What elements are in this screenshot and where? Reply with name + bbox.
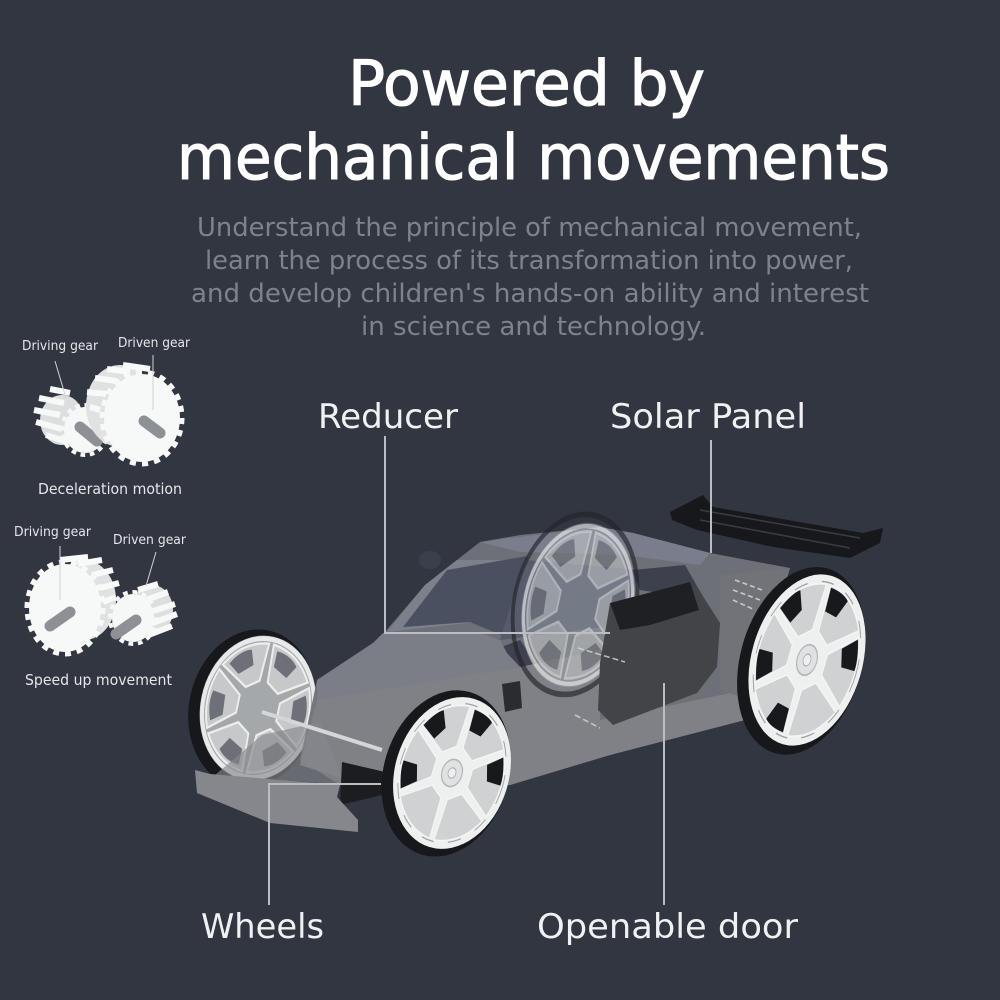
- label: Reducer: Reducer: [318, 397, 458, 437]
- title: Powered by: [348, 47, 705, 120]
- leader lines: [55, 355, 153, 410]
- title: [177, 47, 890, 194]
- subtitle text block: in science and technology.: [361, 312, 706, 342]
- ghost far wheel: [497, 503, 653, 706]
- axle: [262, 712, 382, 750]
- reducer detail: [575, 648, 625, 728]
- label: driving gear: Driving gear: [14, 525, 92, 540]
- leader lines: [60, 546, 156, 600]
- leader lines: [269, 436, 711, 905]
- label: driving gear: Driving gear: [22, 339, 99, 354]
- gear diagram: speed up movement: [14, 525, 187, 689]
- subtitle text block: Understand the principle of mechanical movement,: [197, 213, 862, 243]
- label: driven gear: Driven gear: [113, 533, 187, 548]
- title: mechanical movements: [177, 121, 890, 194]
- label: Wheels: Wheels: [201, 907, 324, 947]
- car body: [300, 527, 790, 790]
- label: Openable door: Openable door: [537, 907, 798, 947]
- car illustration: [174, 495, 886, 873]
- small driven gear: [110, 584, 177, 644]
- door: [598, 582, 720, 725]
- solar panel detail: [733, 580, 762, 610]
- large driving gear: [27, 557, 119, 654]
- subtitle text block: and develop children's hands-on ability and interest: [191, 279, 869, 309]
- front bumper: [195, 770, 358, 832]
- translucent nose over left wheel: [215, 722, 345, 785]
- subtitle text block: [191, 213, 869, 342]
- large driven gear: [86, 365, 182, 464]
- front right wheel: [362, 674, 531, 873]
- rear right wheel: [716, 552, 886, 770]
- mirror: [419, 551, 441, 569]
- label: driven gear: Driven gear: [118, 336, 191, 351]
- small driving gear: [34, 389, 108, 455]
- black front mechanism: [340, 762, 385, 805]
- left front wheel: [174, 617, 331, 800]
- gear diagram: deceleration motion: [22, 336, 191, 498]
- caption: Speed up movement: [25, 671, 172, 689]
- subtitle text block: learn the process of its transformation into power,: [205, 246, 853, 276]
- rear spoiler: [670, 495, 883, 558]
- caption: Deceleration motion: [38, 480, 182, 498]
- label: Solar Panel: Solar Panel: [610, 397, 806, 437]
- side vent: [502, 681, 522, 712]
